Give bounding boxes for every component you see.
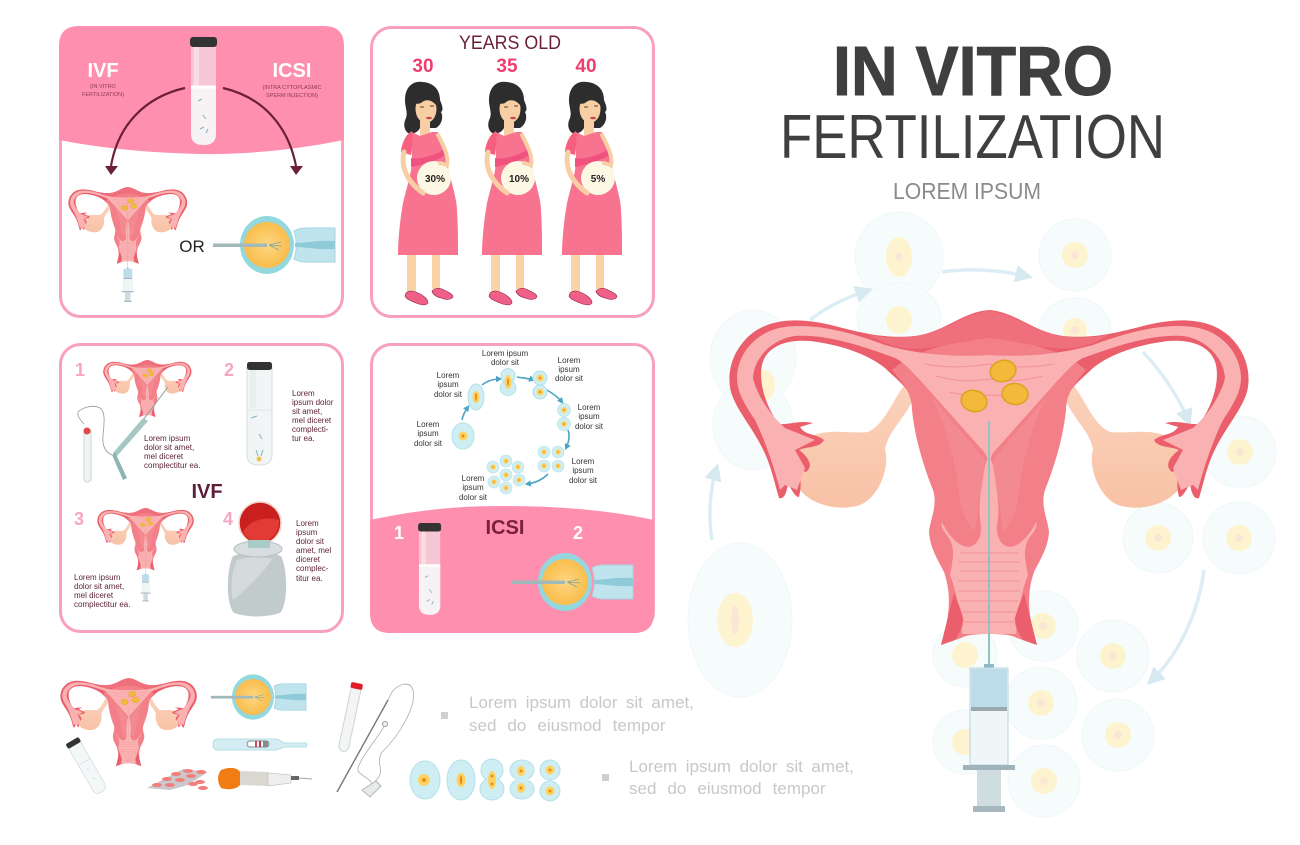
woman aged 35: 35 <box>496 56 518 77</box>
arrow to ICSI <box>223 88 303 175</box>
title: LOREM IPSUM <box>893 178 1041 204</box>
bottom row: injector device icon <box>218 768 312 789</box>
step 3 text: mel diceret <box>74 591 114 600</box>
step 4 text: amet, mel <box>296 546 331 555</box>
panel: ICSI cycle <box>370 344 654 633</box>
cycle labels: ipsum <box>558 365 580 374</box>
cycle labels: ipsum <box>417 429 439 438</box>
cycle labels: ipsum <box>437 380 459 389</box>
step 3 text: complectitur ea. <box>74 600 130 609</box>
bottom row: catheter needle icon <box>337 684 414 797</box>
ICSI heading <box>263 60 321 99</box>
bottom row: cell division stages <box>410 759 560 801</box>
step 2 text: mel diceret <box>292 416 332 425</box>
ICSI heading: (INTRA CYTOPLASMIC <box>263 85 321 91</box>
step 4 text: ipsum <box>296 528 318 537</box>
step 1 number: 1 <box>394 523 404 543</box>
step 1 text: mel diceret <box>144 452 184 461</box>
cell division cycle chart <box>414 349 604 502</box>
step 2 number: 2 <box>573 523 583 543</box>
ICSI heading: ICSI <box>486 517 524 539</box>
step 2 injection into egg <box>511 553 633 611</box>
IVF heading: (IN VITRO <box>90 84 117 90</box>
woman aged 30 <box>398 56 458 305</box>
bottom row: pregnancy test icon <box>213 739 307 750</box>
icon: test tube <box>190 37 217 145</box>
step 2 text: Lorem <box>292 389 315 398</box>
stage 7 cells <box>487 455 525 494</box>
panel: age and success rate <box>372 28 654 316</box>
cell stage 4 <box>510 760 534 799</box>
step 1 test tube <box>418 523 441 615</box>
bottom row: pills icon <box>147 769 208 790</box>
cell stage 5 <box>540 760 560 801</box>
cell stage 2 <box>447 760 475 800</box>
cycle labels: Lorem ipsum <box>482 349 528 358</box>
IVF heading: FERTILIZATION) <box>82 92 124 98</box>
step 4 text: titur ea. <box>296 574 323 583</box>
OR label: OR <box>179 237 205 256</box>
step 4 text: dolor sit <box>296 537 325 546</box>
bullet text 1: sed do eiusmod tempor <box>469 716 666 735</box>
arrow to IVF <box>105 88 185 175</box>
woman aged 35 <box>482 56 542 305</box>
title: FERTILIZATION <box>780 103 1165 172</box>
bullet text 1 <box>441 693 694 735</box>
cycle labels: dolor sit <box>575 422 604 431</box>
bottom row: injection icon <box>211 674 306 720</box>
stage 4 cell <box>533 371 547 399</box>
heading: years old: YEARS OLD <box>459 33 561 54</box>
step 1 collection needle and tube <box>78 387 168 482</box>
bottom row: test tube icon <box>66 737 108 796</box>
stage 1 cell <box>452 423 474 449</box>
step 3 text: dolor sit amet, <box>74 582 124 591</box>
cycle labels: ipsum <box>572 466 594 475</box>
cell stage 3 <box>480 759 504 800</box>
bullet text 1: Lorem ipsum dolor sit amet, <box>469 693 694 712</box>
IVF heading: IVF <box>191 481 223 503</box>
cycle labels: Lorem <box>558 356 581 365</box>
icon: sperm injection into egg <box>213 216 335 274</box>
cycle labels: Lorem <box>578 403 601 412</box>
bullet text 2: sed do eiusmod tempor <box>629 779 826 798</box>
IVF heading <box>82 60 124 98</box>
step 4 text: complec- <box>296 564 329 573</box>
step 3 uterus with syringe <box>97 508 194 601</box>
title: IN VITRO <box>833 32 1113 110</box>
ICSI heading: ICSI <box>273 60 311 82</box>
woman aged 40: 5% <box>591 174 605 185</box>
step 4 text: diceret <box>296 555 321 564</box>
step 1 text: Lorem ipsum <box>144 434 191 443</box>
bottom row: uterus icon <box>60 678 197 766</box>
step 2 test tube <box>247 362 272 465</box>
woman aged 40 <box>562 56 622 305</box>
step 2 text: tur ea. <box>292 434 315 443</box>
step 2 text: complecti- <box>292 425 329 434</box>
stage 5 cells <box>558 404 570 430</box>
step 4 number: 4 <box>223 509 233 529</box>
step 4 text: Lorem <box>296 519 319 528</box>
cycle labels: dolor sit <box>555 374 584 383</box>
bullet text 2: Lorem ipsum dolor sit amet, <box>629 757 854 776</box>
stage 2 cell <box>468 384 484 410</box>
cycle labels: dolor sit <box>491 358 520 367</box>
cycle labels: ipsum <box>578 412 600 421</box>
woman aged 30: 30 <box>412 56 434 77</box>
step 2 number: 2 <box>224 360 234 380</box>
background: faded cell division cycle <box>688 212 1276 817</box>
cycle labels: Lorem <box>437 371 460 380</box>
stage 6 cells <box>538 446 564 472</box>
cycle labels: dolor sit <box>459 493 488 502</box>
step 1 text: dolor sit amet, <box>144 443 194 452</box>
bullet text 2 <box>602 757 854 798</box>
step 1 uterus <box>103 360 191 417</box>
step 4 cryo container <box>228 502 286 616</box>
cycle labels: dolor sit <box>414 439 443 448</box>
cycle labels: Lorem <box>572 457 595 466</box>
cell stage 1 <box>410 761 440 799</box>
panel: IVF or ICSI <box>59 26 344 316</box>
cycle labels: Lorem <box>462 474 485 483</box>
cycle labels: dolor sit <box>569 476 598 485</box>
large syringe <box>963 421 1015 812</box>
title <box>780 32 1165 204</box>
IVF heading: IVF <box>87 60 119 82</box>
step 3 number: 3 <box>74 509 84 529</box>
cycle labels: dolor sit <box>434 390 463 399</box>
large uterus illustration <box>729 310 1249 645</box>
step 3 text: Lorem ipsum <box>74 573 121 582</box>
bottom row: red cap test tube icon <box>337 682 363 753</box>
stage 3 cell <box>500 368 516 396</box>
woman aged 40: 40 <box>575 56 597 77</box>
step 2 text: sit amet, <box>292 407 322 416</box>
cycle labels <box>414 349 604 502</box>
step 2 text: ipsum dolor <box>292 398 334 407</box>
step 1 text: complectitur ea. <box>144 461 200 470</box>
ICSI heading: SPERM INJECTION) <box>266 93 318 99</box>
panel: IVF steps <box>60 344 342 632</box>
cycle labels: Lorem <box>417 420 440 429</box>
icon: uterus with syringe <box>68 187 187 302</box>
step 1 number: 1 <box>75 360 85 380</box>
woman aged 30: 30% <box>425 174 445 185</box>
cycle labels: ipsum <box>462 483 484 492</box>
woman aged 35: 10% <box>509 174 529 185</box>
